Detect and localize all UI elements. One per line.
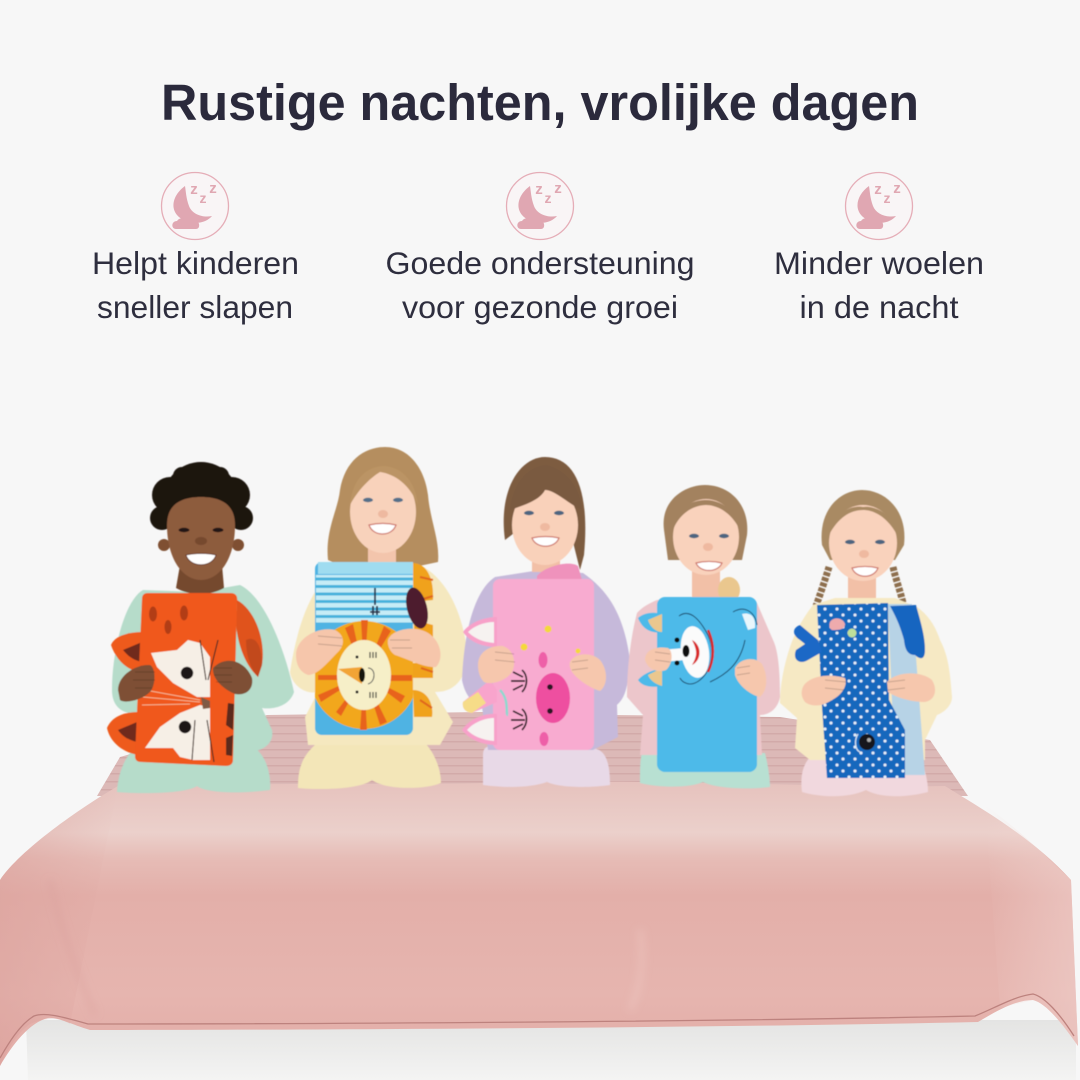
sweater bbox=[780, 598, 952, 760]
pants bbox=[298, 733, 441, 789]
pink blanket bbox=[0, 782, 1078, 1066]
hair bbox=[150, 462, 253, 538]
hands bbox=[296, 629, 441, 675]
hair bbox=[664, 485, 747, 560]
child 1 with fox pillow bbox=[107, 462, 294, 793]
icon: moon and cloud: z bbox=[190, 181, 198, 198]
icon: moon and cloud: z bbox=[535, 181, 543, 198]
benefit text: in de nacht bbox=[800, 289, 959, 325]
child 2 with lion pillow bbox=[290, 447, 468, 789]
dog pillow bbox=[638, 577, 757, 772]
child 5 with whale pillow bbox=[780, 490, 952, 796]
hands bbox=[802, 673, 935, 706]
icon: moon and cloud: z bbox=[200, 190, 206, 206]
face bbox=[673, 499, 740, 597]
benefit: minder woelen bbox=[774, 172, 984, 325]
title: Rustige nachten, vrolijke dagen bbox=[161, 74, 919, 131]
icon: moon and cloud: z bbox=[554, 180, 562, 197]
pants bbox=[640, 753, 770, 788]
benefit: sneller slapen bbox=[92, 172, 299, 325]
icon: moon and cloud bbox=[846, 172, 912, 240]
icon: moon and cloud: z bbox=[209, 180, 217, 197]
benefit: ondersteuning bbox=[386, 172, 694, 325]
pig pillow bbox=[462, 564, 594, 750]
icon: moon and cloud bbox=[162, 172, 228, 240]
face bbox=[350, 466, 418, 566]
pants bbox=[801, 757, 928, 796]
hands bbox=[645, 648, 766, 697]
child 4 with dog pillow bbox=[627, 485, 780, 788]
braids bbox=[816, 567, 903, 606]
icon: moon and cloud bbox=[506, 172, 574, 240]
pants bbox=[117, 745, 270, 793]
icon: moon and cloud: z bbox=[893, 180, 901, 197]
icon: moon and cloud: z bbox=[544, 190, 552, 206]
benefit text: Helpt kinderen bbox=[92, 245, 299, 281]
hair back bbox=[328, 447, 438, 570]
icon: moon and cloud: z bbox=[874, 181, 882, 198]
face bbox=[158, 497, 244, 580]
benefit text bbox=[92, 245, 299, 325]
hands bbox=[118, 661, 252, 702]
benefit text bbox=[774, 245, 984, 325]
benefit text: Goede ondersteuning bbox=[386, 245, 694, 281]
face bbox=[829, 505, 897, 598]
white sheet bbox=[26, 1020, 1076, 1080]
sweater bbox=[627, 598, 780, 755]
children holding pillows bbox=[107, 447, 952, 796]
face bbox=[510, 465, 582, 572]
pants bbox=[483, 746, 610, 787]
whale pillow bbox=[794, 603, 925, 778]
hair bbox=[504, 457, 585, 570]
sweater bbox=[112, 585, 294, 752]
benefit text: Minder woelen bbox=[774, 245, 984, 281]
neck bbox=[176, 565, 224, 594]
sweater bbox=[290, 565, 468, 745]
quilted bed top behind children bbox=[97, 712, 968, 796]
bed bbox=[0, 712, 1078, 1080]
child 3 with pig pillow bbox=[462, 457, 630, 787]
benefit text: sneller slapen bbox=[97, 289, 293, 325]
sweater bbox=[462, 570, 630, 750]
hair bbox=[822, 490, 904, 560]
benefit text: voor gezonde groei bbox=[402, 289, 678, 325]
benefit text bbox=[386, 245, 694, 325]
icon: moon and cloud: z bbox=[884, 190, 890, 206]
fox pillow bbox=[107, 593, 263, 766]
lion pillow bbox=[310, 562, 433, 735]
hands bbox=[478, 646, 606, 691]
